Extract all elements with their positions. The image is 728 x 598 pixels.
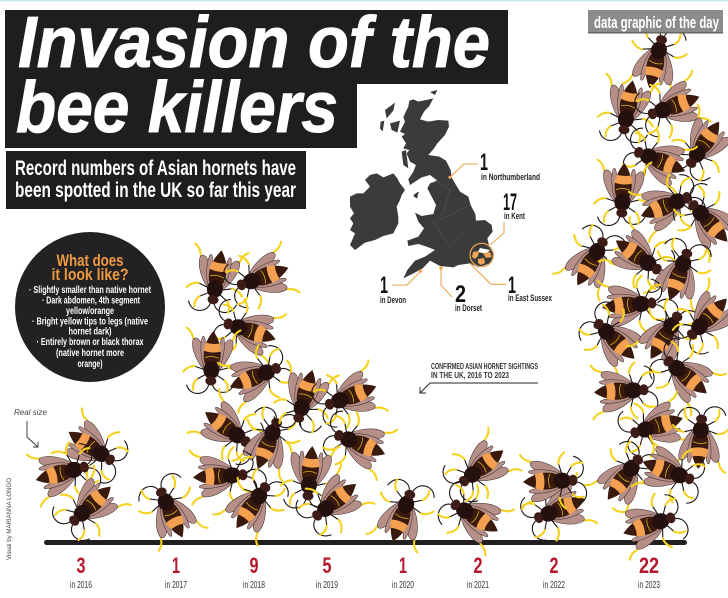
callout: Kent bbox=[490, 189, 525, 245]
chart caption with arrow: IN THE UK, 2016 TO 2023 bbox=[431, 371, 509, 380]
panel: what does it look like: What does bbox=[56, 251, 124, 270]
counts per year: in 2022 bbox=[543, 580, 565, 591]
callout: Devon bbox=[380, 269, 422, 305]
panel: what does it look like: · Dark abdomen, 4th segment bbox=[42, 296, 140, 306]
callout: Dorset: in Dorset bbox=[455, 303, 482, 313]
counts per year: 2 bbox=[474, 553, 482, 578]
callout: Dorset: 2 bbox=[455, 281, 466, 308]
panel: what does it look like: orange) bbox=[78, 359, 102, 370]
panel: what does it look like: · Bright yellow tips to legs (native bbox=[32, 316, 148, 328]
title bbox=[5, 3, 508, 148]
callout: Northumberland: in Northumberland bbox=[481, 172, 540, 182]
panel: what does it look like: · Entirely brown or black thorax bbox=[36, 337, 144, 348]
counts per year: in 2019 bbox=[316, 580, 338, 591]
hornets: 9 in 2018 bbox=[182, 241, 308, 546]
credit: Visual by MARIANNA LONGO bbox=[6, 478, 13, 560]
counts per year: in 2016 bbox=[70, 580, 92, 591]
counts per year: 1 bbox=[399, 553, 407, 578]
hornets: 3 in 2016 bbox=[27, 408, 137, 550]
real size note with arrow: Real size bbox=[14, 408, 47, 417]
hornets: 22 in 2023 bbox=[552, 20, 728, 561]
callout: Northumberland bbox=[448, 149, 540, 182]
callout: Northumberland: 1 bbox=[480, 149, 488, 176]
callout: Dorset bbox=[439, 266, 482, 313]
counts per year: 5 bbox=[322, 553, 332, 578]
counts per year: in 2017 bbox=[165, 580, 187, 591]
panel: what does it look like: · Slightly smaller than native hornet bbox=[29, 285, 151, 296]
counts per year: 2 bbox=[550, 553, 558, 578]
real size note with arrow bbox=[14, 408, 47, 447]
hornets: 2 in 2021 bbox=[429, 427, 522, 556]
counts per year: 3 bbox=[76, 553, 86, 578]
callout: East Sussex: in East Sussex bbox=[508, 293, 552, 303]
chart caption with arrow: CONFIRMED ASIAN HORNET SIGHTINGS bbox=[431, 362, 538, 371]
callout: Devon: in Devon bbox=[380, 295, 406, 305]
counts per year: in 2018 bbox=[243, 580, 265, 591]
panel: what does it look like: (native hornet more bbox=[56, 348, 124, 359]
callout: Kent: 17 bbox=[503, 189, 517, 216]
subtitle: been spotted in the UK so far this year bbox=[15, 179, 296, 202]
title: Invasion of the bbox=[18, 3, 490, 83]
panel: what does it look like: yellow/orange bbox=[66, 306, 114, 317]
subtitle: Record numbers of Asian hornets have bbox=[15, 157, 296, 180]
hornets: 5 in 2019 bbox=[268, 359, 397, 546]
subtitle bbox=[6, 151, 306, 209]
counts per year bbox=[70, 553, 660, 591]
callout: Devon: 1 bbox=[380, 272, 388, 299]
counts per year: 9 bbox=[250, 553, 258, 578]
counts per year: 22 bbox=[639, 553, 659, 578]
callout: East Sussex: 1 bbox=[508, 272, 516, 299]
counts per year: in 2021 bbox=[467, 580, 489, 591]
panel: what does it look like: it look like? bbox=[52, 265, 128, 284]
panel: what does it look like: hornet dark) bbox=[68, 326, 112, 338]
map of the UK and Ireland bbox=[350, 90, 494, 278]
hornets: 1 in 2017 bbox=[130, 468, 209, 551]
counts per year: 1 bbox=[172, 553, 180, 578]
chart caption with arrow bbox=[420, 362, 538, 393]
Kent sightings marker bbox=[470, 243, 493, 267]
counts per year: in 2020 bbox=[392, 580, 414, 591]
bar chart baseline bbox=[44, 540, 687, 545]
counts per year: in 2023 bbox=[638, 580, 660, 591]
hornets: 1 in 2020 bbox=[366, 472, 441, 553]
callout: Kent: in Kent bbox=[504, 211, 525, 221]
callout: East Sussex bbox=[470, 263, 552, 303]
hornets: 2 in 2022 bbox=[516, 452, 597, 549]
title: bee killers bbox=[16, 68, 338, 148]
panel: what does it look like bbox=[15, 232, 165, 382]
